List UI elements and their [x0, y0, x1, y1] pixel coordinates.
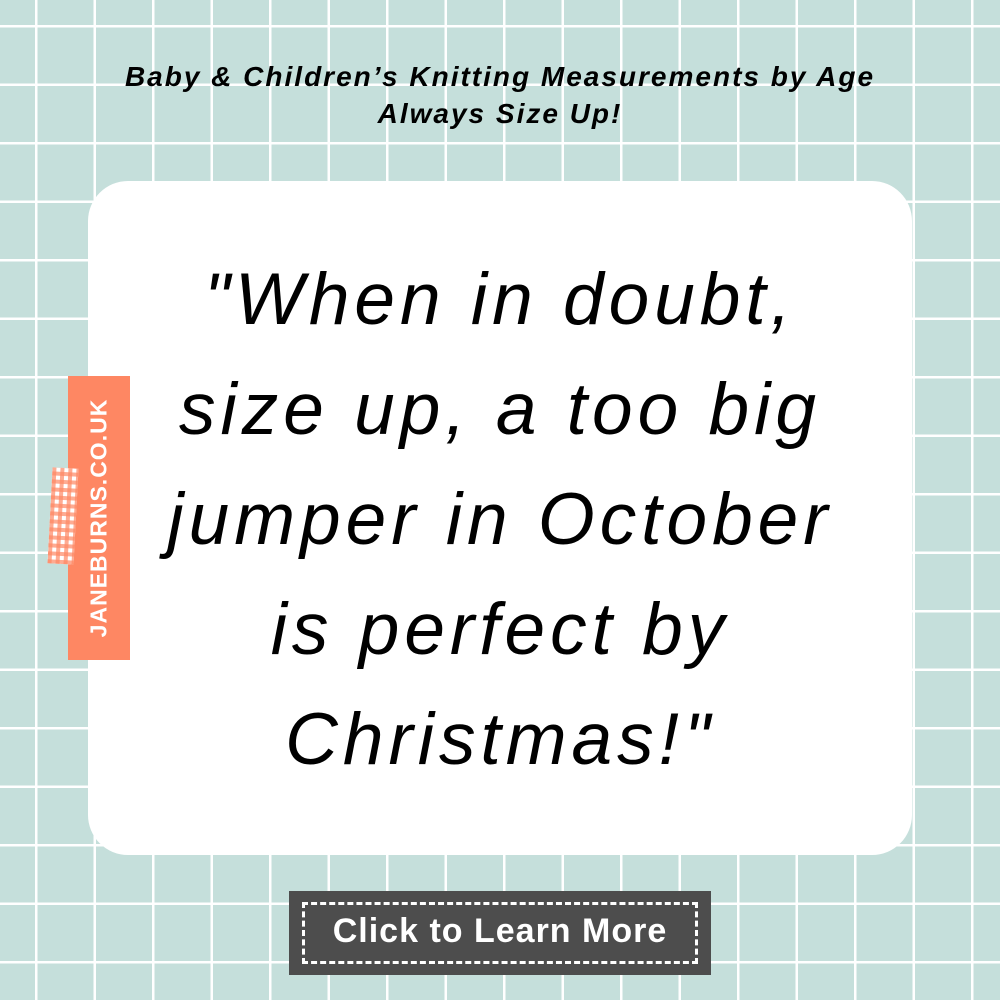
button: click to learn more: Click to Learn More: [333, 912, 667, 950]
title: [125, 61, 875, 129]
quote text: jumper in October: [167, 479, 833, 560]
title: Always Size Up!: [378, 98, 622, 129]
quote text: [159, 259, 833, 780]
button: click to learn more: [289, 891, 711, 975]
title: Baby & Children’s Knitting Measurements by Age: [125, 61, 875, 92]
quote text: size up, a too big: [179, 369, 821, 450]
decorative tape: [48, 467, 78, 565]
panel: quote card: [88, 181, 912, 855]
quote text: "When in doubt,: [204, 259, 796, 340]
side label: website: [68, 376, 130, 660]
quote text: Christmas!": [285, 699, 715, 780]
quote text: is perfect by: [271, 589, 729, 670]
side label: website: JANEBURNS.CO.UK: [86, 399, 112, 637]
